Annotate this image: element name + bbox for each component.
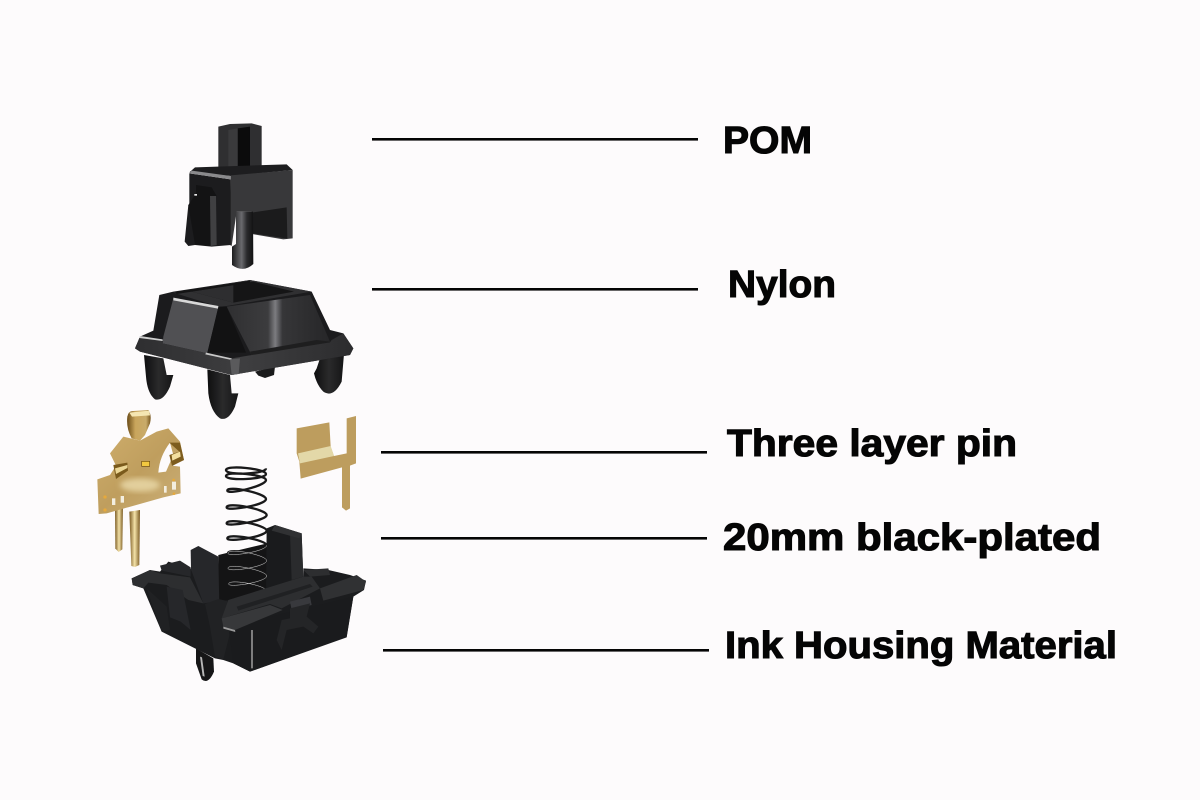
label: Three layer pin: Three layer pin [727,423,1017,465]
leader line: Three layer pin [381,451,707,454]
pin post [196,648,214,681]
leader line: 20mm black-plated [381,537,707,540]
front-left leg [144,355,173,400]
front-centre leg [207,369,238,419]
icon: bottom housing back walls [191,525,303,613]
icon: POM stem [185,123,293,269]
icon: gold pin [297,416,356,511]
label: Ink Housing Material: Ink Housing Material [725,625,1117,667]
right leg [314,354,344,394]
leader line: Nylon [372,288,698,291]
label: Nylon: Nylon [728,264,836,306]
leader line: Ink Housing Material [383,649,709,652]
icon: gold contact clip [97,410,184,567]
leader line: POM [372,138,698,141]
icon: bottom housing [132,561,366,681]
icon: spring [226,467,267,591]
label: 20mm black-plated: 20mm black-plated [723,517,1101,559]
back leg [255,367,275,378]
label: POM: POM [723,120,812,162]
icon: nylon top housing [135,280,353,419]
